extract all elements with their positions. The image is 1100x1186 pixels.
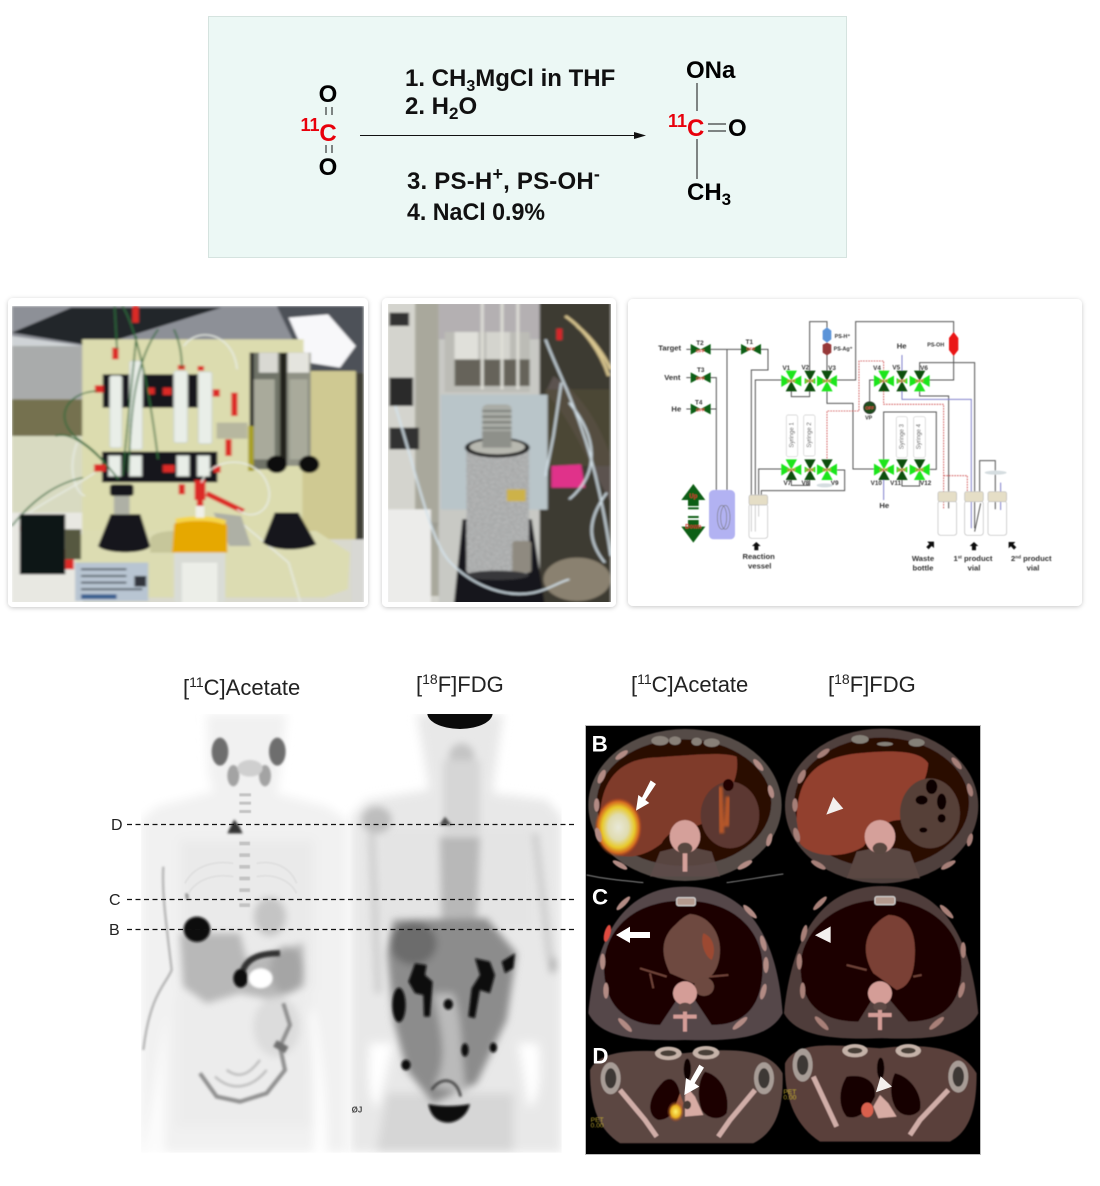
row labels: D <box>592 1043 608 1068</box>
equipment label <box>75 563 148 601</box>
reagents steps 1 and 2: 1. CH <box>405 65 466 92</box>
reagents steps 3 and 4: + <box>492 164 503 184</box>
valve state labels: OFF <box>787 379 796 384</box>
valve state labels: OFF <box>746 347 755 352</box>
inlet labels: He <box>671 404 681 413</box>
V valves <box>781 371 930 480</box>
valve labels: V9 <box>831 480 839 487</box>
yellow cap bottle <box>172 506 227 604</box>
clear tubing <box>395 339 611 594</box>
black tray <box>454 519 545 604</box>
reagents steps 1 and 2: 3 <box>466 78 475 95</box>
slice D acetate: PET <box>591 1117 604 1124</box>
heading: right FDG column: 18 <box>834 671 850 687</box>
reagents steps 1 and 2 <box>405 65 615 123</box>
heading: left acetate column: 11 <box>189 674 204 690</box>
valve labels: V6 <box>920 365 928 372</box>
coil <box>481 404 513 432</box>
vessel captions: Waste <box>912 554 934 563</box>
acetate soft tissue <box>180 897 304 1057</box>
vessel captions: st <box>958 555 962 560</box>
reactant: carbon dioxide: 11 <box>300 115 320 135</box>
valve labels: V2 <box>801 364 810 371</box>
valve state labels: OFF <box>823 467 832 472</box>
acetate spine <box>239 793 251 907</box>
valve state labels: OFF <box>879 379 888 384</box>
inlet labels <box>658 341 907 510</box>
heading: left FDG column: F]FDG <box>438 672 504 697</box>
vessel captions: 2 <box>1011 554 1015 563</box>
slice C acetate <box>588 887 783 1040</box>
helium lines <box>884 355 1001 528</box>
panel: photo of reaction vessel <box>382 298 616 607</box>
heading: right acetate column: 11 <box>637 671 652 687</box>
vessel captions: nd <box>1015 555 1021 560</box>
row labels: B <box>592 732 608 757</box>
scanner marker: ØJ <box>352 1106 362 1115</box>
heading: left acetate column: C]Acetate <box>204 675 300 700</box>
arrow: slice B acetate <box>636 780 656 811</box>
level guide lines <box>127 824 575 930</box>
up and down arrows <box>681 484 705 543</box>
valve state labels: OFF <box>865 405 874 410</box>
reagents steps 3 and 4: 4. NaCl 0.9% <box>407 199 545 226</box>
inlet labels: He <box>897 341 907 350</box>
valve labels <box>695 339 932 487</box>
slice D acetate <box>590 1046 783 1143</box>
product: sodium acetate: C <box>687 115 704 142</box>
red fitting <box>557 329 562 340</box>
valve labels: V3 <box>828 365 836 372</box>
photo background: foil enclosure <box>12 306 364 606</box>
vessel captions: Reaction <box>742 552 775 561</box>
valve state labels: OFF <box>879 467 888 472</box>
valve state labels: OFF <box>806 467 815 472</box>
reagents steps 3 and 4: , PS-OH <box>503 168 594 195</box>
acetate head glands <box>143 738 286 1050</box>
valve state labels: OFF <box>915 379 924 384</box>
syringe labels: Syringe 3 <box>900 423 906 449</box>
product: sodium acetate: CH <box>687 179 722 206</box>
reactant: carbon dioxide: C <box>319 120 337 147</box>
valve labels: V8 <box>801 480 810 487</box>
reagents steps 3 and 4: - <box>594 164 600 184</box>
up and down arrows: Down <box>685 525 702 531</box>
acetate bowel <box>200 1003 290 1102</box>
reagents steps 3 and 4 <box>407 164 600 226</box>
acetate lesions <box>184 819 280 988</box>
heading: left FDG column: [ <box>416 672 422 697</box>
valve state labels: OFF <box>915 467 924 472</box>
valve labels: T2 <box>696 340 704 347</box>
insulated cylinder <box>465 431 531 580</box>
valve labels: V1 <box>782 365 791 372</box>
panel: synthesis module flow diagram <box>628 299 1082 606</box>
vessel pointer arrows <box>752 542 1016 550</box>
reagents steps 1 and 2: 2 <box>449 104 458 123</box>
reaction arrow <box>360 132 646 139</box>
vacuum pump <box>864 402 876 414</box>
vessel captions: vessel <box>748 561 771 570</box>
syringes <box>109 361 212 476</box>
scan: FDG whole body <box>351 714 562 1153</box>
enclosure background <box>387 303 613 604</box>
tubing <box>12 335 300 603</box>
valve bars <box>102 374 217 482</box>
level labels: B <box>109 922 120 939</box>
reactant: carbon dioxide: O <box>319 81 337 108</box>
inlet labels: Target <box>658 344 682 353</box>
valve state labels <box>696 347 924 472</box>
valve state labels: OFF <box>696 408 705 413</box>
syringe labels: Syringe 1 <box>790 422 796 448</box>
arrowhead: slice B FDG <box>826 797 843 815</box>
black reaction vial holders <box>98 484 316 552</box>
syringe labels: Syringe 4 <box>917 423 923 449</box>
scan: acetate whole body <box>141 714 347 1153</box>
valve state labels: OFF <box>787 467 796 472</box>
valve labels: V7 <box>783 480 792 487</box>
valve labels: V4 <box>873 365 881 372</box>
heading: left acetate column: [ <box>183 675 189 700</box>
syringes <box>786 415 925 458</box>
dashed waste lines <box>827 361 967 508</box>
up and down arrows: Up <box>689 494 698 500</box>
heading: left FDG column: 18 <box>422 671 438 687</box>
panel: axial PET/CT slices <box>586 726 980 1154</box>
heading: right acetate column: C]Acetate <box>652 672 748 697</box>
valve state labels: OFF <box>898 379 907 384</box>
panel: photo of synthesis module <box>8 298 368 607</box>
panel: reaction scheme <box>208 16 846 258</box>
inlet labels: Vent <box>664 373 681 382</box>
vessel captions <box>742 552 1052 572</box>
valve labels: T3 <box>697 367 705 374</box>
reaction vessel <box>749 495 768 538</box>
valve state labels: OFF <box>898 467 907 472</box>
slice D acetate: 0.00 <box>591 1122 604 1129</box>
inlet labels: He <box>879 501 889 510</box>
module panel <box>75 339 356 598</box>
slice D FDG: PET <box>783 1089 796 1096</box>
valve labels: V12 <box>920 480 932 487</box>
vessel captions: 1 <box>953 554 958 563</box>
divider strip <box>349 714 351 1153</box>
acetate body silhouette <box>141 714 347 1153</box>
level labels <box>109 817 123 939</box>
syringe labels <box>790 422 923 449</box>
slice D FDG: 0.00 <box>783 1094 797 1101</box>
flowmeters <box>248 353 319 473</box>
valve labels: V11 <box>890 480 902 487</box>
level labels: D <box>111 817 123 834</box>
coil vessel <box>709 490 735 539</box>
gray block and red connectors <box>62 306 248 571</box>
heading: right acetate column: [ <box>631 672 637 697</box>
tubing lines <box>686 322 995 532</box>
reagents steps 1 and 2: O <box>458 93 477 120</box>
arrowhead: slice C FDG <box>815 926 831 943</box>
valve state labels: OFF <box>806 379 815 384</box>
cartridge labels: PS-OH <box>927 342 944 348</box>
arrowhead: slice D FDG <box>876 1076 892 1092</box>
FDG head and brain <box>427 714 493 729</box>
acetate ribs <box>185 862 297 893</box>
valve labels: V10 <box>871 480 882 487</box>
reagents steps 3 and 4: 3. PS-H <box>407 168 492 195</box>
cartridges <box>823 327 958 356</box>
cartridge labels: PS-H⁺ <box>835 334 850 340</box>
valve state labels: OFF <box>696 349 705 354</box>
valve labels: T4 <box>695 399 703 406</box>
arrow: slice C acetate <box>616 927 650 943</box>
chart: whole-body PET scans <box>109 714 575 1153</box>
slice D FDG <box>783 1044 977 1142</box>
product: sodium acetate: 3 <box>722 190 731 209</box>
heading: right FDG column: F]FDG <box>850 672 916 697</box>
vessel captions: product <box>1021 554 1052 563</box>
product: sodium acetate: O <box>728 115 747 142</box>
product: sodium acetate <box>668 57 747 209</box>
reactant: carbon dioxide <box>300 81 337 181</box>
black box <box>20 514 81 574</box>
filter discs <box>817 471 1007 487</box>
vessel captions: vial <box>968 563 980 572</box>
slice B FDG <box>785 729 978 883</box>
arrow: slice D acetate <box>684 1065 704 1095</box>
slice B acetate <box>587 729 783 883</box>
slice C FDG <box>784 886 978 1039</box>
syringe labels: Syringe 2 <box>807 422 813 448</box>
reagents steps 1 and 2: MgCl in THF <box>475 65 615 92</box>
valve labels: VP <box>865 416 873 422</box>
valve labels: T1 <box>746 339 753 346</box>
valve state labels: OFF <box>696 376 705 381</box>
vessel captions: bottle <box>913 563 933 572</box>
cartridge labels: PS-Ag⁺ <box>834 346 853 352</box>
level labels: C <box>109 892 121 909</box>
reagents steps 1 and 2: 2. H <box>405 93 449 120</box>
valve labels: V5 <box>892 364 901 371</box>
vessel captions: product <box>962 554 993 563</box>
row labels <box>592 732 608 1068</box>
FDG body silhouette <box>351 714 562 1153</box>
reactant: carbon dioxide: O <box>319 154 337 181</box>
FDG soft tissue <box>362 743 556 1103</box>
heater box <box>441 395 547 510</box>
row labels: C <box>592 884 608 909</box>
cartridge labels <box>834 334 944 352</box>
T valves <box>691 344 761 414</box>
collection vials <box>938 492 1007 535</box>
valve state labels: OFF <box>823 379 832 384</box>
metal blocks <box>445 303 530 392</box>
FDG lesions and bowel activity <box>392 817 515 1123</box>
product: sodium acetate: ONa <box>686 57 736 84</box>
heading: right FDG column: [ <box>828 672 834 697</box>
product: sodium acetate: 11 <box>668 111 687 131</box>
vessel captions: vial <box>1027 563 1039 572</box>
